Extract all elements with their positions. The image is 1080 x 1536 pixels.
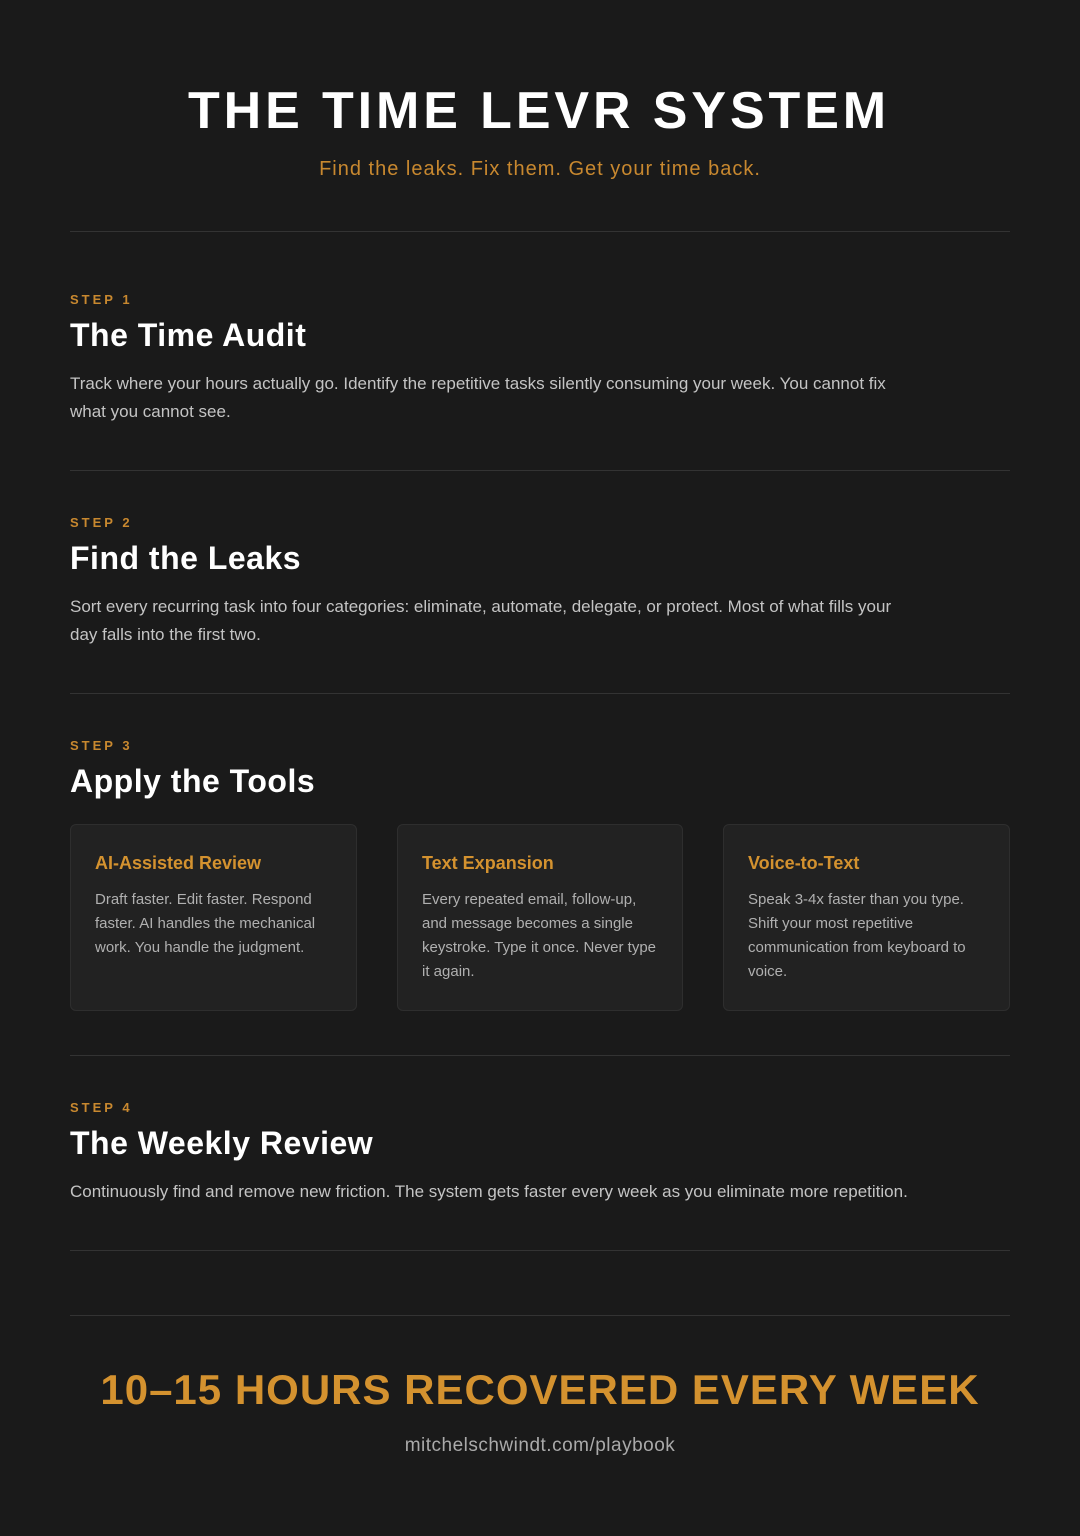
step 1 panel: [70, 292, 886, 421]
step 2 body: Sort every recurring task into four categories: eliminate, automate, delegate, or protect. Most of what fills your: [70, 597, 891, 616]
step 4 body: Continuously find and remove new friction. The system gets faster every week as you eliminate more repetition.: [70, 1182, 908, 1201]
card text: it again.: [422, 963, 475, 980]
card: Voice-to-Text: [723, 824, 1010, 1011]
step 1 heading: The Time Audit: [70, 317, 306, 353]
card title: Text Expansion: [422, 853, 554, 873]
step 1 body: Track where your hours actually go. Identify the repetitive tasks silently consuming your week. You cannot fix: [70, 374, 886, 393]
card text: Every repeated email, follow-up,: [422, 891, 636, 908]
card text: Draft faster. Edit faster. Respond: [95, 891, 312, 908]
card text: faster. AI handles the mechanical: [95, 915, 315, 932]
card text: keystroke. Type it once. Never type: [422, 939, 656, 956]
card text: Shift your most repetitive: [748, 915, 913, 932]
step 1 body: [70, 374, 886, 421]
step 3 panel: [70, 738, 1010, 1011]
title: THE TIME LEVR SYSTEM: [188, 82, 890, 140]
card: Text Expansion: [397, 824, 683, 1011]
step 2 panel: [70, 515, 891, 644]
step 4 heading: The Weekly Review: [70, 1125, 373, 1161]
card text: [95, 891, 315, 956]
step 2 label: STEP 2: [70, 515, 133, 530]
step 3 heading: Apply the Tools: [70, 763, 315, 799]
header: [188, 82, 890, 180]
footer headline: 10–15 HOURS RECOVERED EVERY WEEK: [100, 1366, 980, 1413]
card title: Voice-to-Text: [748, 853, 859, 873]
step 1 body: what you cannot see.: [70, 402, 231, 421]
step 4 label: STEP 4: [70, 1100, 133, 1115]
step 1 label: STEP 1: [70, 292, 133, 307]
card text: work. You handle the judgment.: [95, 939, 304, 956]
step 2 body: day falls into the first two.: [70, 625, 261, 644]
card text: [422, 891, 656, 980]
card text: and message becomes a single: [422, 915, 633, 932]
step 2 body: [70, 597, 891, 644]
card text: voice.: [748, 963, 787, 980]
card: AI-Assisted Review: [70, 824, 357, 1011]
card title: AI-Assisted Review: [95, 853, 261, 873]
footer: [100, 1366, 980, 1456]
step 4 panel: [70, 1100, 908, 1201]
footer link: mitchelschwindt.com/playbook: [405, 1435, 675, 1456]
step 3 label: STEP 3: [70, 738, 133, 753]
card text: [748, 891, 966, 980]
subtitle: Find the leaks. Fix them. Get your time back.: [319, 158, 761, 180]
step 2 heading: Find the Leaks: [70, 540, 301, 576]
card text: communication from keyboard to: [748, 939, 966, 956]
card text: Speak 3-4x faster than you type.: [748, 891, 964, 908]
